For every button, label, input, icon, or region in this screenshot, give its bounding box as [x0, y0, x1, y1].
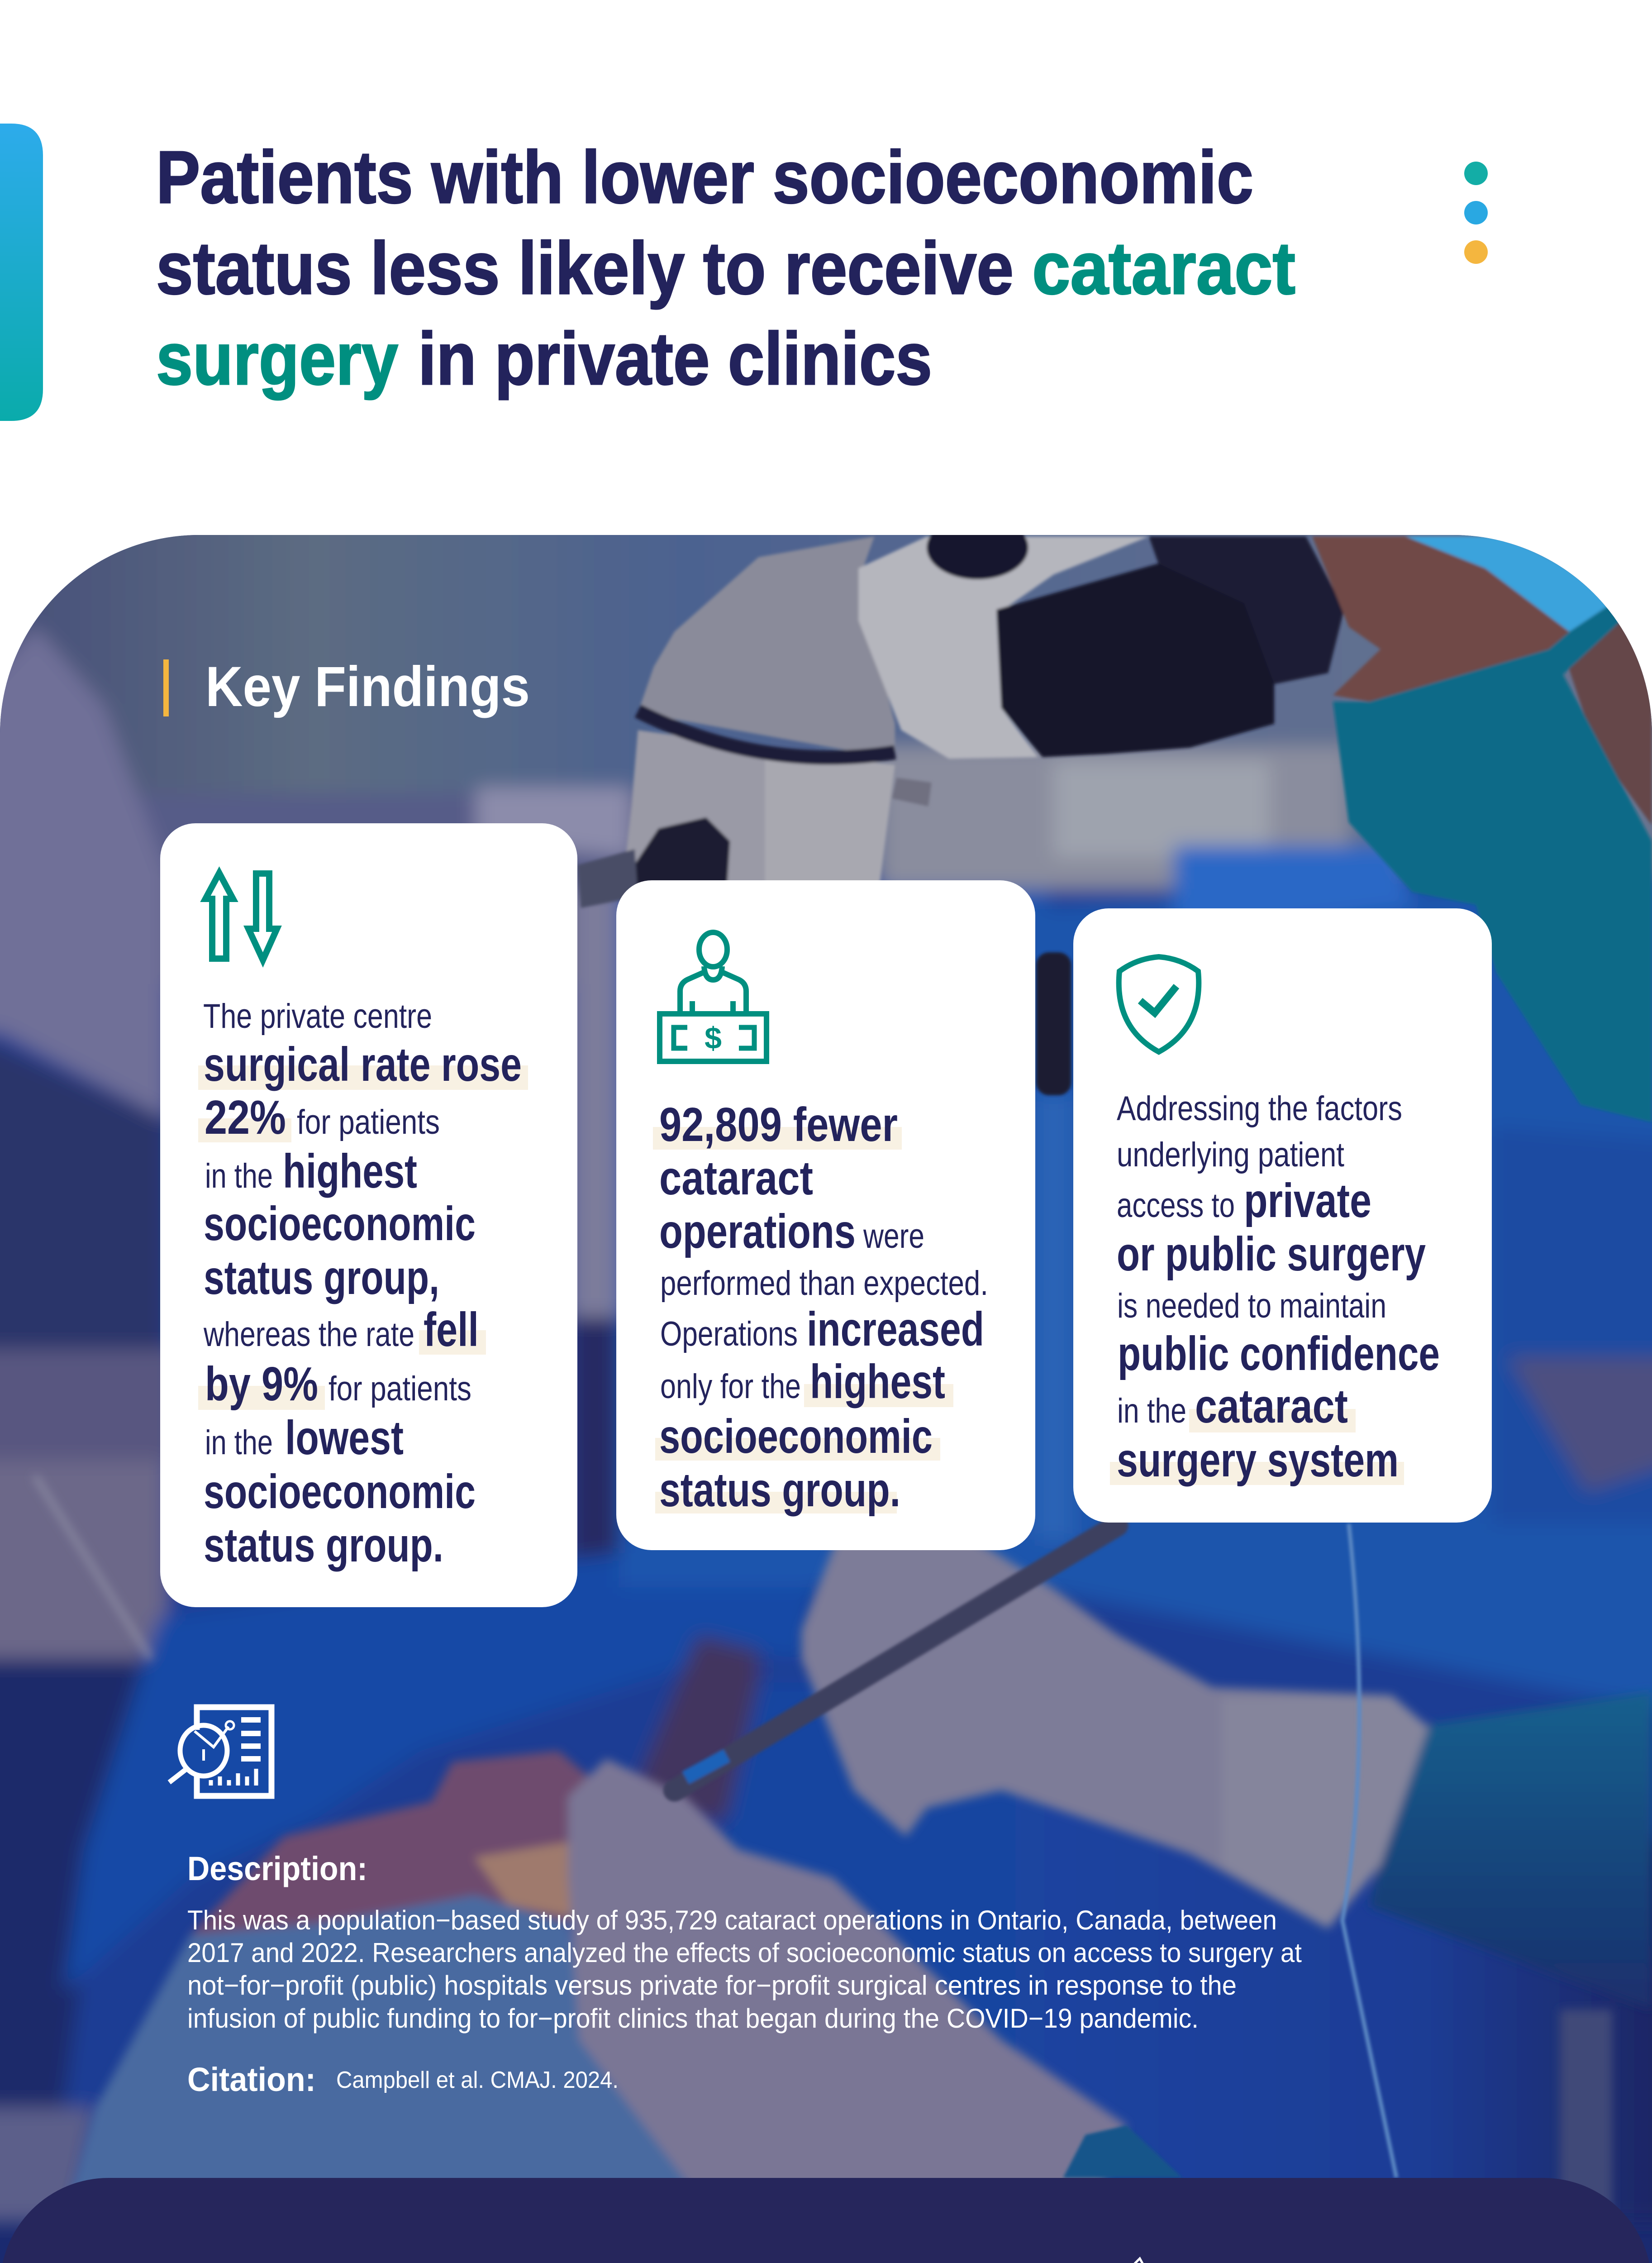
text: surgical rate finding: The private centre: [203, 997, 432, 1036]
panel: public confidence card: [1073, 908, 1492, 1523]
text: surgical rate finding: for patients: [297, 1103, 440, 1141]
text: public confidence finding: public confidence: [1118, 1327, 1440, 1380]
icon: person at money counter: [660, 932, 766, 1061]
title: cataract: [1032, 227, 1295, 310]
panel: logo footer: [0, 2178, 1652, 2263]
text: fewer operations finding: [653, 1098, 988, 1517]
text: surgical rate finding: lowest: [285, 1411, 404, 1465]
text: citation: [187, 2061, 619, 2098]
text: surgical rate finding: by 9%: [205, 1357, 318, 1411]
text: public confidence finding: is needed to maintain: [1117, 1287, 1386, 1325]
text: description: infusion of public funding to for−profit clinics that began during the COVID−19 pandemic.: [187, 2003, 1199, 2034]
text: surgical rate finding: in the: [205, 1423, 273, 1462]
text: surgical rate finding: 22%: [205, 1091, 286, 1144]
text: surgical rate finding: highest: [283, 1145, 417, 1198]
text: fewer operations finding: increased: [807, 1303, 984, 1356]
text: description: 2017 and 2022. Researchers analyzed the effects of socioeconomic status on access to surgery at: [187, 1938, 1302, 1968]
text: surgical rate finding: whereas the rate: [203, 1315, 414, 1354]
text: description: [187, 1850, 1302, 2034]
text: public confidence finding: surgery system: [1117, 1433, 1399, 1487]
text: surgical rate finding: socioeconomic: [204, 1197, 476, 1251]
text: public confidence finding: in the: [1117, 1392, 1186, 1430]
text: description: This was a population−based study of 935,729 cataract operations in Ontario, Canada, between: [187, 1905, 1277, 1935]
text: citation: Citation:: [187, 2061, 316, 2098]
panel: fewer operations card: [616, 880, 1035, 1550]
title: Patients with lower socioeconomic: [156, 136, 1253, 219]
icon: report with magnifier: [169, 1707, 271, 1796]
text: surgical rate finding: status group,: [204, 1251, 439, 1304]
accent bar: [0, 124, 43, 421]
text: fewer operations finding: highest: [810, 1355, 945, 1408]
text: public confidence finding: cataract: [1195, 1380, 1348, 1433]
text: fewer operations finding: Operations: [660, 1315, 798, 1353]
text: surgical rate finding: [198, 997, 528, 1572]
text: surgical rate finding: socioeconomic: [204, 1465, 476, 1518]
title: in private clinics: [418, 317, 932, 400]
text: surgical rate finding: for patients: [328, 1370, 471, 1408]
icon: up and down arrows: [205, 873, 277, 960]
icon: shield with check: [1119, 957, 1199, 1052]
text: public confidence finding: Addressing the factors: [1117, 1089, 1402, 1128]
text: public confidence finding: [1110, 1089, 1440, 1487]
panel: surgery photo background: [0, 508, 1652, 2263]
text: fewer operations finding: performed than expected.: [660, 1264, 988, 1303]
text: public confidence finding: access to: [1117, 1186, 1235, 1225]
icon: person at money counter: $: [705, 1021, 722, 1055]
text: fewer operations finding: status group.: [659, 1463, 900, 1517]
text: surgical rate finding: fell: [424, 1303, 479, 1356]
text: surgical rate finding: surgical rate rose: [204, 1038, 522, 1091]
text: description: Description:: [187, 1850, 367, 1887]
text: surgical rate finding: status group.: [204, 1518, 443, 1572]
text: citation: Campbell et al. CMAJ. 2024.: [336, 2067, 619, 2093]
text: public confidence finding: private: [1244, 1174, 1371, 1227]
text: public confidence finding: or public surgery: [1117, 1227, 1426, 1281]
text: fewer operations finding: 92,809 fewer: [659, 1098, 898, 1151]
decorative dots: [1464, 162, 1488, 264]
text: description: not−for−profit (public) hospitals versus private for−profit surgical centres in response to the: [187, 1970, 1237, 2000]
text: fewer operations finding: socioeconomic: [659, 1410, 933, 1463]
title: status less likely to receive: [156, 227, 1014, 310]
text: public confidence finding: underlying patient: [1117, 1136, 1344, 1174]
text: fewer operations finding: operations: [659, 1205, 856, 1258]
text: fewer operations finding: only for the: [660, 1367, 801, 1406]
heading: Key Findings: Key Findings: [205, 655, 530, 718]
logo: University of Toronto: [1111, 2258, 1489, 2263]
title: [156, 136, 1295, 400]
title: surgery: [156, 317, 398, 400]
text: fewer operations finding: cataract: [659, 1151, 813, 1205]
panel: surgical rate card: [160, 823, 577, 1607]
text: surgical rate finding: in the: [205, 1157, 273, 1195]
text: fewer operations finding: were: [863, 1217, 924, 1256]
